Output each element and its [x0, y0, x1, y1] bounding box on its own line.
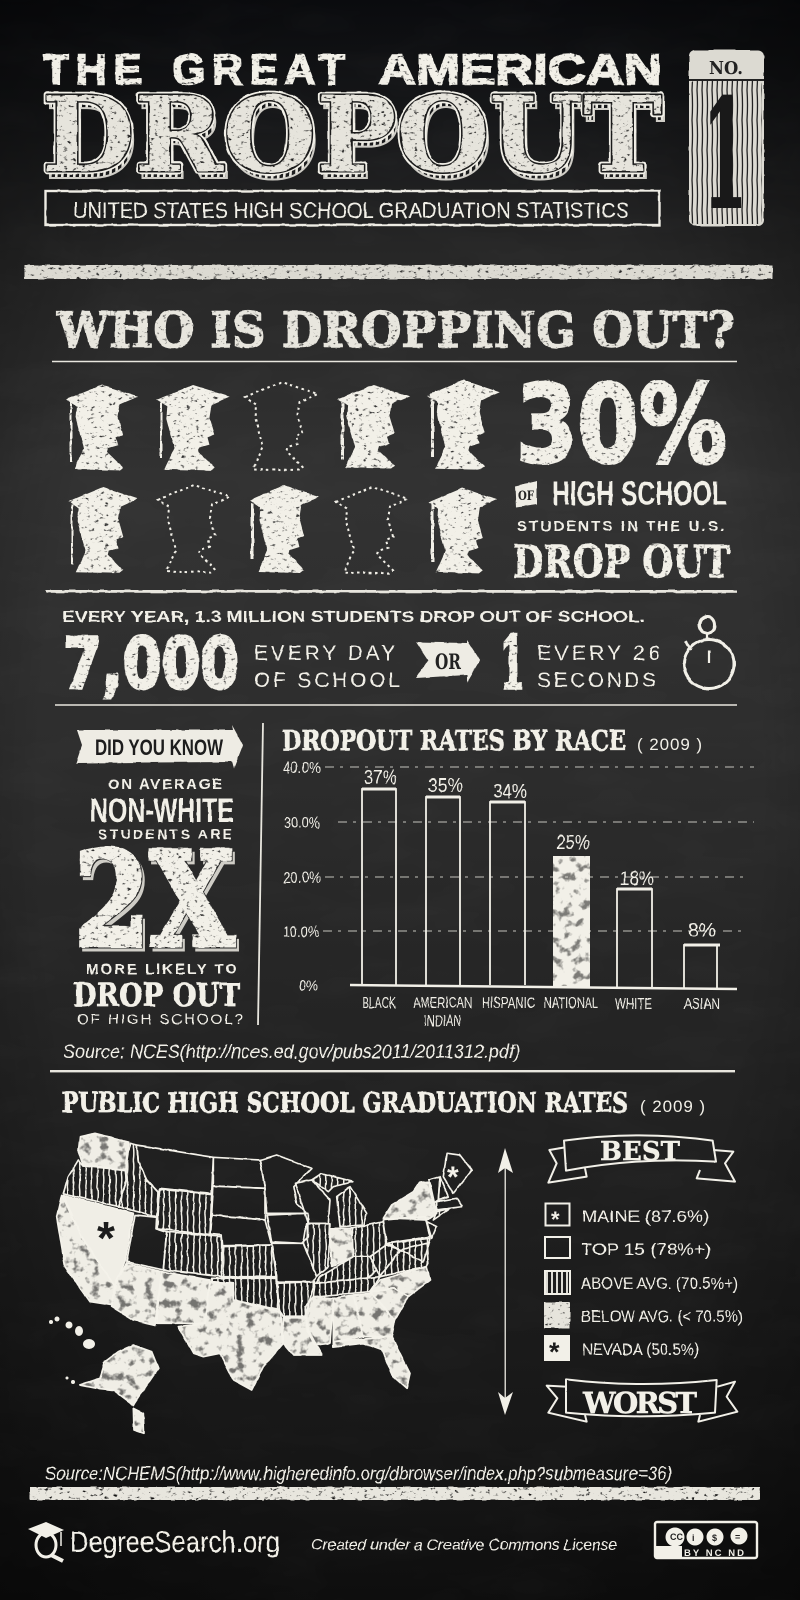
- panel: graduate head icons: [66, 380, 500, 573]
- text: of high school: HIGH SCHOOL: [552, 475, 727, 513]
- value labels: 25%: [556, 832, 590, 854]
- icon: graduate 3 outline: [245, 382, 318, 470]
- subtitle box: [46, 191, 660, 225]
- badge: CC BY NC ND: BY NC ND: [684, 1548, 744, 1559]
- value labels: 37%: [364, 767, 397, 789]
- text: every year: EVERY YEAR, 1.3 MILLION STUDENTS DROP OUT OF SCHOOL.: [62, 609, 645, 626]
- bar: Black 37%: [362, 789, 396, 985]
- bar: American Indian 35%: [426, 797, 460, 985]
- icon: graduate 6: [68, 487, 138, 573]
- map: above-average states: [63, 1143, 450, 1317]
- value labels: 35%: [428, 775, 463, 797]
- stat: 7,000: 7,000: [63, 623, 239, 705]
- logo: DegreeSearch.org: DegreeSearch.org: [70, 1526, 280, 1559]
- text: students in the US: STUDENTS IN THE U.S.: [517, 518, 724, 535]
- panel: did you know: [73, 725, 243, 1028]
- heading: dropout rates by race: ( 2009 ): [637, 735, 702, 754]
- divider line: [50, 1070, 735, 1072]
- map: stripes and outlines: [57, 1133, 472, 1433]
- badge: CC BY NC ND: [655, 1522, 757, 1559]
- arrow banner: did you know: DID YOU KNOW: [95, 735, 223, 760]
- heading: graduation rates: PUBLIC HIGH SCHOOL GRADUATION RATES: [62, 1088, 628, 1119]
- badge: CC BY NC ND: i: [692, 1533, 695, 1543]
- legend: top 15: [545, 1237, 711, 1259]
- value labels: 8%: [688, 920, 716, 942]
- No. 1 badge: NO.: [709, 58, 743, 79]
- map: Hawaii islands: [49, 1316, 95, 1384]
- icon: graduate 2: [156, 385, 230, 470]
- source: NCHEMS: Source:NCHEMS(http://www.higheredinfo.org/dbrowser/index.php?submeasure=36): [45, 1464, 672, 1485]
- y axis labels: 0%: [299, 978, 318, 995]
- title: Dropout: DROPOUT: [42, 73, 662, 196]
- title: Dropout: DROPOUT: [42, 73, 662, 196]
- logo: DegreeSearch.org: [28, 1522, 280, 1561]
- badge: CC BY NC ND: =: [735, 1532, 740, 1542]
- source: NCES: Source: NCES(http://nces.ed.gov/pubs2011/2011312.pdf): [63, 1042, 520, 1063]
- top divider: [24, 265, 773, 279]
- map: top-15 state outlines: [127, 1145, 472, 1282]
- divider line: [52, 360, 737, 362]
- banner: best: [548, 1135, 735, 1183]
- text: every day of school: EVERY DAY: [254, 642, 395, 665]
- y axis labels: 30.0%: [284, 815, 320, 832]
- title: The Great American: [43, 46, 662, 94]
- title: The Great American: AMERICAN: [378, 46, 662, 94]
- stat: 2X: 2X: [77, 827, 237, 980]
- arrow banner: did you know: [76, 725, 243, 768]
- value labels: 18%: [620, 868, 654, 890]
- category labels: WHITE: [615, 996, 652, 1013]
- value labels: [364, 767, 716, 942]
- x axis: [350, 985, 737, 989]
- bars: [362, 789, 720, 988]
- subtitle box: UNITED STATES HIGH SCHOOL GRADUATION STATISTICS: [73, 198, 629, 223]
- category labels: [362, 995, 720, 1030]
- stat: 30 percent: 30%: [516, 363, 727, 488]
- legend: Maine: [546, 1204, 709, 1232]
- category labels: NATIONAL: [544, 995, 598, 1012]
- icon: graduate 4: [337, 385, 410, 469]
- title: Dropout: DROPOUT: [42, 73, 662, 196]
- text: more likely to: MORE LIKELY TO: [86, 961, 237, 978]
- category labels: ASIAN: [684, 996, 720, 1013]
- badge: CC BY NC ND: $: [712, 1533, 717, 1543]
- stat: 2X: 2X: [74, 823, 234, 976]
- y axis labels: 10.0%: [283, 924, 319, 941]
- arrow: best to worst: [498, 1148, 513, 1415]
- y axis labels: [283, 760, 321, 995]
- divider line: [46, 590, 737, 593]
- text: every 26 seconds: EVERY 26: [537, 642, 660, 665]
- heading: dropout rates by race: DROPOUT RATES BY RACE: [282, 726, 626, 757]
- text: every day of school: OF SCHOOL: [254, 669, 400, 692]
- text: students are: STUDENTS ARE: [98, 826, 232, 842]
- divider line: [55, 704, 737, 706]
- icon: stopwatch: [684, 616, 734, 688]
- map: Nevada asterisk: *: [97, 1212, 115, 1264]
- y axis labels: 20.0%: [283, 870, 321, 887]
- legend: top 15: TOP 15 (78%+): [581, 1240, 711, 1259]
- icon: graduate 1: [66, 385, 138, 470]
- map: below-average states: [57, 1133, 437, 1433]
- arrow: or: OR: [435, 649, 461, 674]
- banner: worst: [547, 1379, 737, 1422]
- stat: 2X: 2X: [74, 823, 234, 976]
- icon: graduate 10: [428, 488, 497, 573]
- title: Dropout: DROPOUT: [45, 80, 665, 203]
- category labels: INDIAN: [424, 1013, 461, 1030]
- bar: Hispanic 34%: [490, 802, 525, 985]
- banner: worst: WORST: [582, 1386, 697, 1420]
- legend: Nevada: [544, 1335, 699, 1367]
- map: Nevada fill: [63, 1195, 133, 1287]
- legend: above average: [545, 1271, 738, 1294]
- bar: National 25%: [553, 856, 590, 987]
- icon: graduate 5: [427, 380, 500, 470]
- text: every day of school: [254, 642, 400, 692]
- text: every 26 seconds: [537, 642, 660, 692]
- icon: graduate 8: [250, 485, 318, 573]
- legend: [544, 1204, 743, 1367]
- legend: Maine: *: [551, 1207, 560, 1232]
- heading: who is dropping out: WHO IS DROPPING OUT?: [56, 301, 735, 359]
- text: 1: [500, 620, 525, 705]
- category labels: AMERICAN: [413, 995, 472, 1012]
- legend: Nevada: *: [549, 1337, 560, 1367]
- heading: graduation rates: ( 2009 ): [640, 1097, 705, 1116]
- text: of high school: OF: [518, 489, 535, 504]
- category labels: HISPANIC: [482, 995, 535, 1012]
- map: Maine asterisk: *: [447, 1161, 459, 1194]
- text: drop out: DROP OUT: [73, 976, 240, 1014]
- value labels: 34%: [493, 781, 527, 803]
- text: drop out: DROP OUT: [513, 537, 730, 588]
- bar chart: dropout rates by race: [283, 760, 754, 1030]
- text: of high school: [515, 475, 727, 513]
- bar: Asian 8%: [684, 945, 720, 988]
- icon: cap and magnifier: [28, 1522, 64, 1561]
- icon: graduate 7 outline: [158, 485, 230, 572]
- legend: above average: ABOVE AVG. (70.5%+): [581, 1274, 738, 1293]
- title: The Great American: THE: [43, 46, 142, 94]
- text: of high school: OF HIGH SCHOOL?: [77, 1011, 243, 1028]
- map: USA graduation rates: [49, 1133, 472, 1433]
- legend: Maine: MAINE (87.6%): [582, 1207, 709, 1226]
- vertical divider: [258, 723, 263, 1025]
- text: every 26 seconds: SECONDS: [537, 669, 656, 692]
- arrow: or: [416, 640, 480, 682]
- bar: White 18%: [617, 889, 652, 987]
- banner: best: BEST: [600, 1137, 681, 1167]
- No. 1 badge: [689, 50, 764, 243]
- icon: graduate 9 outline: [336, 487, 408, 573]
- legend: below average: [544, 1302, 743, 1328]
- badge: CC BY NC ND: CC: [670, 1532, 683, 1542]
- legend: below average: BELOW AVG. (< 70.5%): [581, 1307, 743, 1326]
- text: on average: ON AVERAGE: [108, 776, 222, 793]
- title: The Great American: GREAT: [172, 46, 345, 94]
- chart gridlines: [323, 767, 754, 931]
- text: non-white: NON-WHITE: [90, 792, 234, 830]
- y axis labels: 40.0%: [283, 760, 321, 777]
- bottom divider: [30, 1487, 760, 1500]
- text: creative commons: Created under a Creative Commons License: [311, 1537, 617, 1554]
- category labels: BLACK: [362, 995, 396, 1012]
- legend: Nevada: NEVADA (50.5%): [582, 1340, 699, 1359]
- map: below-average state outlines: [57, 1133, 437, 1433]
